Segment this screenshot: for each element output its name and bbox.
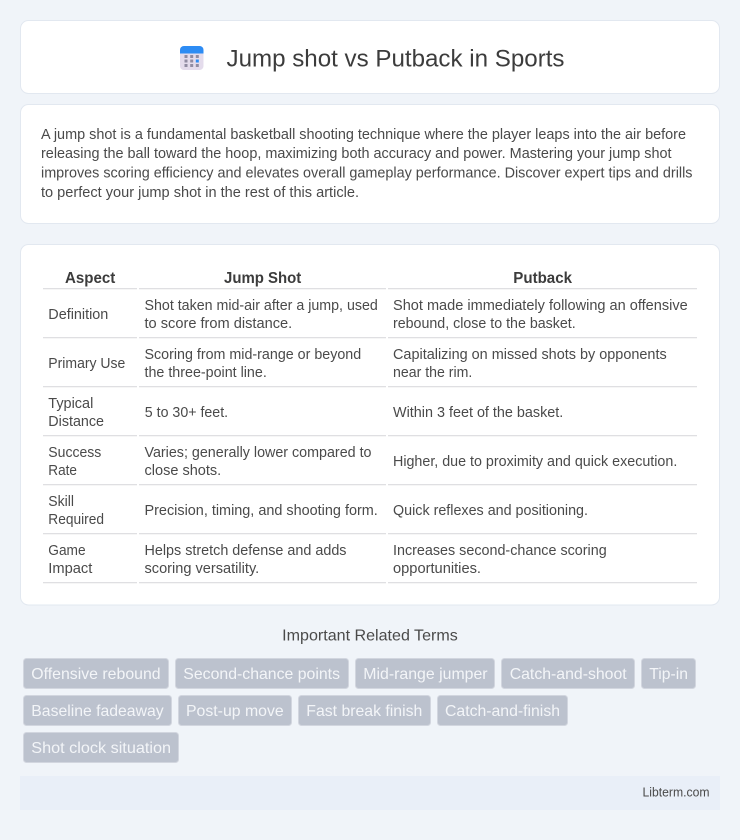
footer — [20, 776, 720, 810]
panel: comparison table — [20, 244, 720, 605]
table row: success rate: Rate — [48, 463, 77, 479]
panel: introduction — [20, 104, 720, 224]
table row: primary use: the three-point line. — [144, 365, 267, 381]
tag: baseline fadeaway — [24, 696, 172, 726]
tag: post-up move: Post-up move — [186, 703, 284, 720]
table row: skill required: Skill — [48, 494, 74, 510]
tag: offensive rebound — [24, 658, 168, 688]
table row: typical distance: 5 to 30+ feet. — [145, 405, 228, 421]
table row: primary use: Capitalizing on missed shots by opponents — [393, 347, 667, 363]
tag: shot clock situation — [24, 732, 178, 762]
panel: header — [20, 20, 720, 94]
table row: game impact: Increases second-chance scoring — [393, 543, 607, 559]
tag: catch-and-shoot — [502, 658, 634, 688]
table row: primary use — [48, 347, 667, 381]
table row: game impact: Game — [48, 543, 86, 559]
footer credit: Libterm.com — [642, 785, 710, 800]
tag: catch-and-finish — [438, 696, 568, 726]
tag: offensive rebound: Offensive rebound — [31, 666, 161, 683]
panel: related term tags — [24, 658, 696, 762]
tag: tip-in — [642, 658, 696, 688]
table row: definition: rebound, close to the basket. — [393, 316, 576, 332]
tag: tip-in: Tip-in — [649, 666, 688, 683]
title: Jump shot vs Putback in Sports — [226, 46, 564, 73]
text block: introduction paragraph: improves scoring efficiency and elevates overall gameplay performance. Discover expert tips and drills — [41, 166, 692, 182]
table row: skill required: Quick reflexes and positioning. — [393, 503, 588, 519]
table row: typical distance — [48, 396, 563, 430]
table row: success rate — [48, 445, 677, 479]
table row: definition: Shot taken mid-air after a jump, used — [144, 298, 378, 314]
tag: catch-and-shoot: Catch-and-shoot — [510, 666, 627, 683]
table header row: Jump Shot — [224, 270, 301, 287]
tag: fast break finish: Fast break finish — [306, 703, 422, 720]
table row: success rate: close shots. — [144, 463, 221, 479]
table row: success rate: Higher, due to proximity and quick execution. — [393, 454, 677, 470]
table row: game impact: opportunities. — [393, 561, 481, 577]
table row: definition — [48, 298, 688, 332]
table row: game impact: Impact — [48, 561, 92, 577]
table row: skill required: Required — [48, 512, 104, 528]
table row: success rate: Varies; generally lower compared to — [144, 445, 372, 461]
heading: important related terms: Important Related Terms — [282, 628, 458, 645]
table row: primary use: Primary Use — [48, 356, 125, 372]
table header row: Aspect — [65, 270, 115, 287]
text block: introduction paragraph — [41, 127, 692, 201]
table row: primary use: Scoring from mid-range or beyond — [144, 347, 361, 363]
table row: game impact: Helps stretch defense and adds — [144, 543, 346, 559]
table row: game impact — [48, 543, 607, 577]
tag: post-up move — [178, 696, 292, 726]
tag: second-chance points — [176, 658, 348, 688]
table row: typical distance: Within 3 feet of the basket. — [393, 405, 563, 421]
table row: definition: Shot made immediately following an offensive — [393, 298, 688, 314]
text block: introduction paragraph: to perfect your jump shot in the rest of this article. — [41, 185, 359, 201]
table row: skill required: Precision, timing, and shooting form. — [144, 503, 378, 519]
table row: typical distance: Typical — [48, 396, 93, 412]
table row: definition: Definition — [48, 307, 108, 323]
tag: fast break finish — [298, 696, 430, 726]
tag: second-chance points: Second-chance points — [183, 666, 340, 683]
tag: shot clock situation: Shot clock situation — [31, 740, 171, 757]
table header row: Putback — [513, 270, 572, 287]
tag: catch-and-finish: Catch-and-finish — [445, 703, 560, 720]
text block: introduction paragraph: A jump shot is a fundamental basketball shooting technique where the player leaps into the air before — [41, 127, 686, 143]
icon: calendar — [180, 46, 204, 70]
table row: success rate: Success — [48, 445, 101, 461]
tag: mid-range jumper: Mid-range jumper — [363, 666, 488, 683]
table header row — [65, 270, 572, 287]
table row: primary use: near the rim. — [393, 365, 472, 381]
table row: skill required — [48, 494, 588, 528]
text block: introduction paragraph: releasing the ball toward the hoop, maximizing both accuracy and power. Mastering your jump shot — [41, 146, 672, 162]
table row: typical distance: Distance — [48, 414, 104, 430]
tag: mid-range jumper — [356, 658, 494, 688]
table row: game impact: scoring versatility. — [144, 561, 259, 577]
table row: definition: to score from distance. — [144, 316, 292, 332]
tag: baseline fadeaway: Baseline fadeaway — [31, 703, 164, 720]
